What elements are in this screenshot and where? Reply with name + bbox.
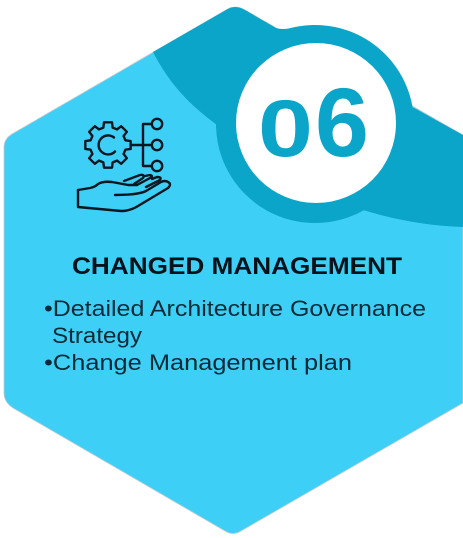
network nodes bbox=[131, 119, 162, 171]
gear bbox=[85, 122, 131, 168]
bullet: change management plan: •Change Management plan bbox=[44, 350, 352, 375]
dark corner band with number ring bbox=[153, 7, 463, 227]
icon: gear with network nodes over open hand bbox=[78, 119, 170, 211]
bullet list bbox=[44, 296, 426, 375]
open hand bbox=[78, 175, 170, 211]
digit 6: 6 bbox=[315, 68, 369, 177]
number badge bbox=[236, 43, 396, 203]
bullet: governance strategy, line 1: •Detailed Architecture Governance bbox=[44, 296, 426, 321]
digit 0: 0 bbox=[258, 83, 313, 174]
bullet: governance strategy, line 2: Strategy bbox=[52, 323, 142, 348]
heading: CHANGED MANAGEMENT bbox=[72, 253, 402, 280]
